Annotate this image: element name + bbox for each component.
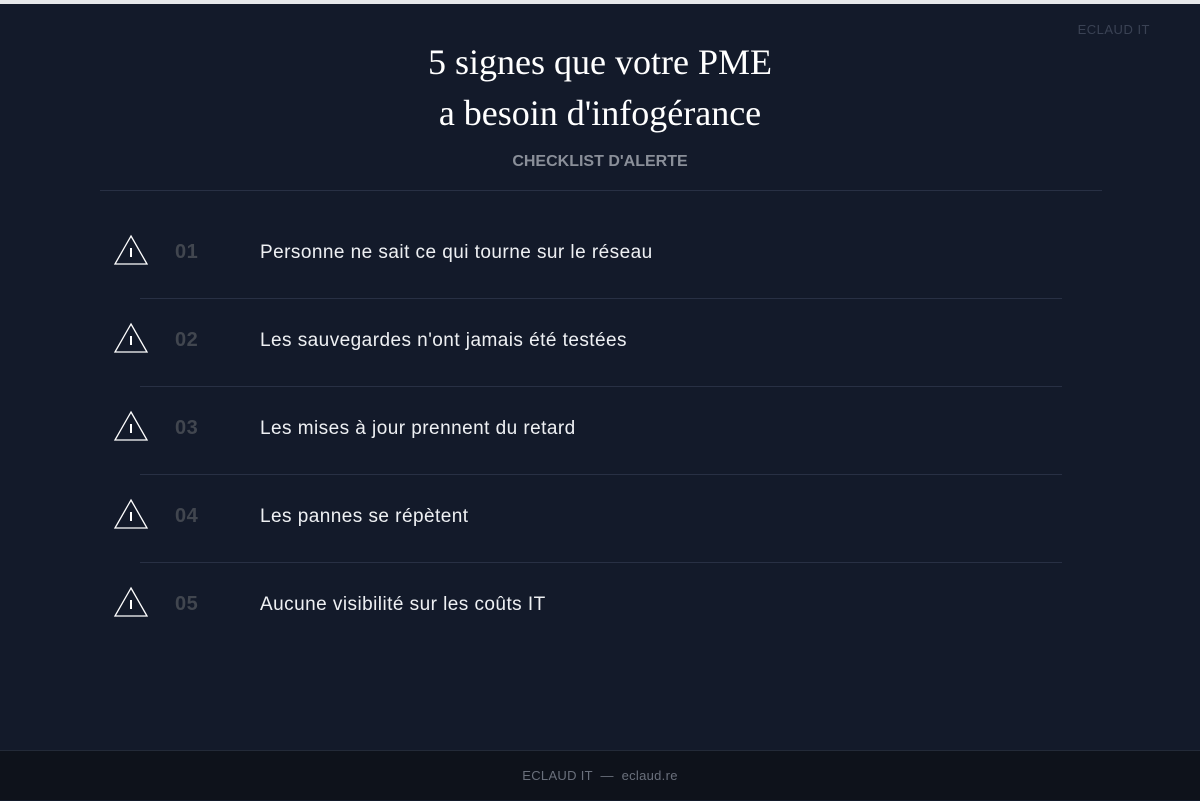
item 05: Aucune visibilité sur les coûts IT (260, 594, 546, 615)
item 03: Les mises à jour prennent du retard (260, 418, 576, 439)
footer: ECLAUD IT — eclaud.re (522, 768, 678, 783)
brand label: ECLAUD IT (1078, 22, 1150, 37)
icon: warning (114, 498, 148, 529)
title (428, 42, 772, 133)
icon: warning (114, 322, 148, 353)
item 02: 02 (175, 329, 198, 351)
item 02 (114, 322, 627, 353)
item 05: 05 (175, 593, 198, 615)
item 03: 03 (175, 417, 198, 439)
item 04: Les pannes se répètent (260, 506, 468, 527)
item 01: Personne ne sait ce qui tourne sur le réseau (260, 242, 653, 263)
subtitle: CHECKLIST D'ALERTE (512, 153, 688, 170)
item 04: 04 (175, 505, 198, 527)
title: a besoin d'infogérance (439, 93, 761, 133)
icon: warning (114, 410, 148, 441)
item 05 (114, 586, 546, 617)
item 02: Les sauvegardes n'ont jamais été testées (260, 330, 627, 351)
item 04 (114, 498, 468, 529)
icon: warning (114, 586, 148, 617)
footer (0, 750, 1200, 800)
item 03 (114, 410, 576, 441)
item 01: 01 (175, 241, 198, 263)
icon: warning (114, 234, 148, 265)
item 01 (114, 234, 653, 265)
title: 5 signes que votre PME (428, 42, 772, 82)
